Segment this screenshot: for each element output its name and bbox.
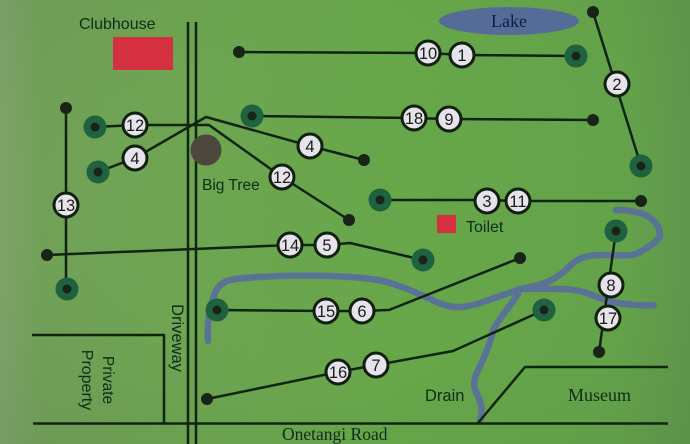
hole 16 and 7: 7	[371, 357, 381, 375]
hole 10 and 1: 1	[457, 47, 467, 65]
hole 18 and 9: 18	[405, 110, 423, 128]
hole 14 and 5: 5	[322, 237, 332, 255]
hole 12: 12	[126, 117, 144, 135]
hole 8 and 17	[593, 220, 628, 358]
toilet	[437, 215, 504, 236]
hole 10 and 1	[233, 41, 588, 68]
hole 3 and 11	[368, 188, 647, 213]
big tree	[190, 134, 260, 194]
lake	[439, 7, 579, 35]
clubhouse: Clubhouse	[79, 16, 156, 33]
hole 15 and 6: 6	[357, 303, 367, 321]
roads and property boundaries	[32, 335, 668, 424]
hole 16 and 7: 16	[329, 364, 347, 382]
hole 10 and 1: 10	[419, 45, 437, 63]
label: private property: Property	[78, 350, 95, 410]
hole 14 and 5	[41, 233, 434, 272]
hole 18 and 9: 9	[444, 111, 454, 129]
hole 8 and 17: 8	[606, 277, 616, 295]
hole 3 and 11: 3	[482, 193, 492, 211]
hole 13: 13	[57, 197, 75, 215]
hole 13	[54, 102, 78, 300]
label: private property	[78, 350, 116, 410]
hole 2	[587, 6, 652, 178]
hole 12	[84, 113, 355, 226]
hole 4: 4	[130, 150, 140, 168]
hole 16 and 7	[201, 298, 556, 405]
hole 14 and 5: 14	[281, 237, 299, 255]
hole 2: 2	[612, 76, 622, 94]
hole 12: 12	[273, 169, 291, 187]
hole 15 and 6	[206, 252, 526, 323]
label: museum: Museum	[568, 385, 631, 405]
label: private property: Private	[99, 356, 116, 404]
hole 3 and 11: 11	[509, 193, 527, 211]
clubhouse	[79, 16, 173, 70]
hole 15 and 6: 15	[317, 303, 335, 321]
label: driveway: Driveway	[168, 304, 186, 373]
hole 4: 4	[305, 138, 315, 156]
hole 4	[86, 117, 370, 184]
label: Onetangi Road: Onetangi Road	[282, 424, 388, 444]
toilet: Toilet	[466, 219, 504, 236]
label: drain: Drain	[425, 387, 464, 405]
driveway	[188, 22, 196, 444]
big tree: Big Tree	[202, 177, 260, 194]
hole 18 and 9	[240, 104, 599, 131]
lake: Lake	[491, 11, 527, 31]
drain waterway	[208, 210, 660, 421]
hole 8 and 17: 17	[599, 310, 617, 328]
